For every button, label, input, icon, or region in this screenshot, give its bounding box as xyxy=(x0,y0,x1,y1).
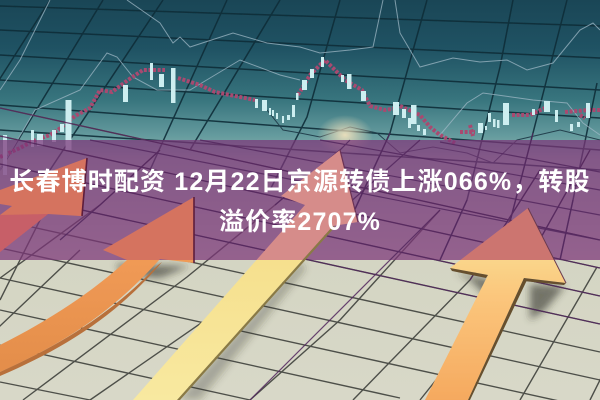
arrow: middle left xyxy=(0,197,194,376)
band grid lines xyxy=(0,108,600,400)
light glow xyxy=(317,115,373,155)
cyan candlesticks xyxy=(3,57,590,175)
moving average lines xyxy=(0,0,600,170)
lower grid xyxy=(0,108,600,400)
arrow shadows xyxy=(116,262,565,400)
red candlesticks xyxy=(0,60,600,157)
arrow: top left xyxy=(0,158,87,252)
arrow: centre yellow xyxy=(133,150,358,400)
title: 长春博时配资 12月22日京源转债上涨066%，转股 xyxy=(9,168,591,196)
title xyxy=(9,168,591,236)
top chart grid xyxy=(0,0,600,260)
arrow: right xyxy=(425,208,566,400)
title: 溢价率2707% xyxy=(219,208,381,236)
dark trend line xyxy=(267,110,600,163)
purple title band xyxy=(0,140,600,260)
